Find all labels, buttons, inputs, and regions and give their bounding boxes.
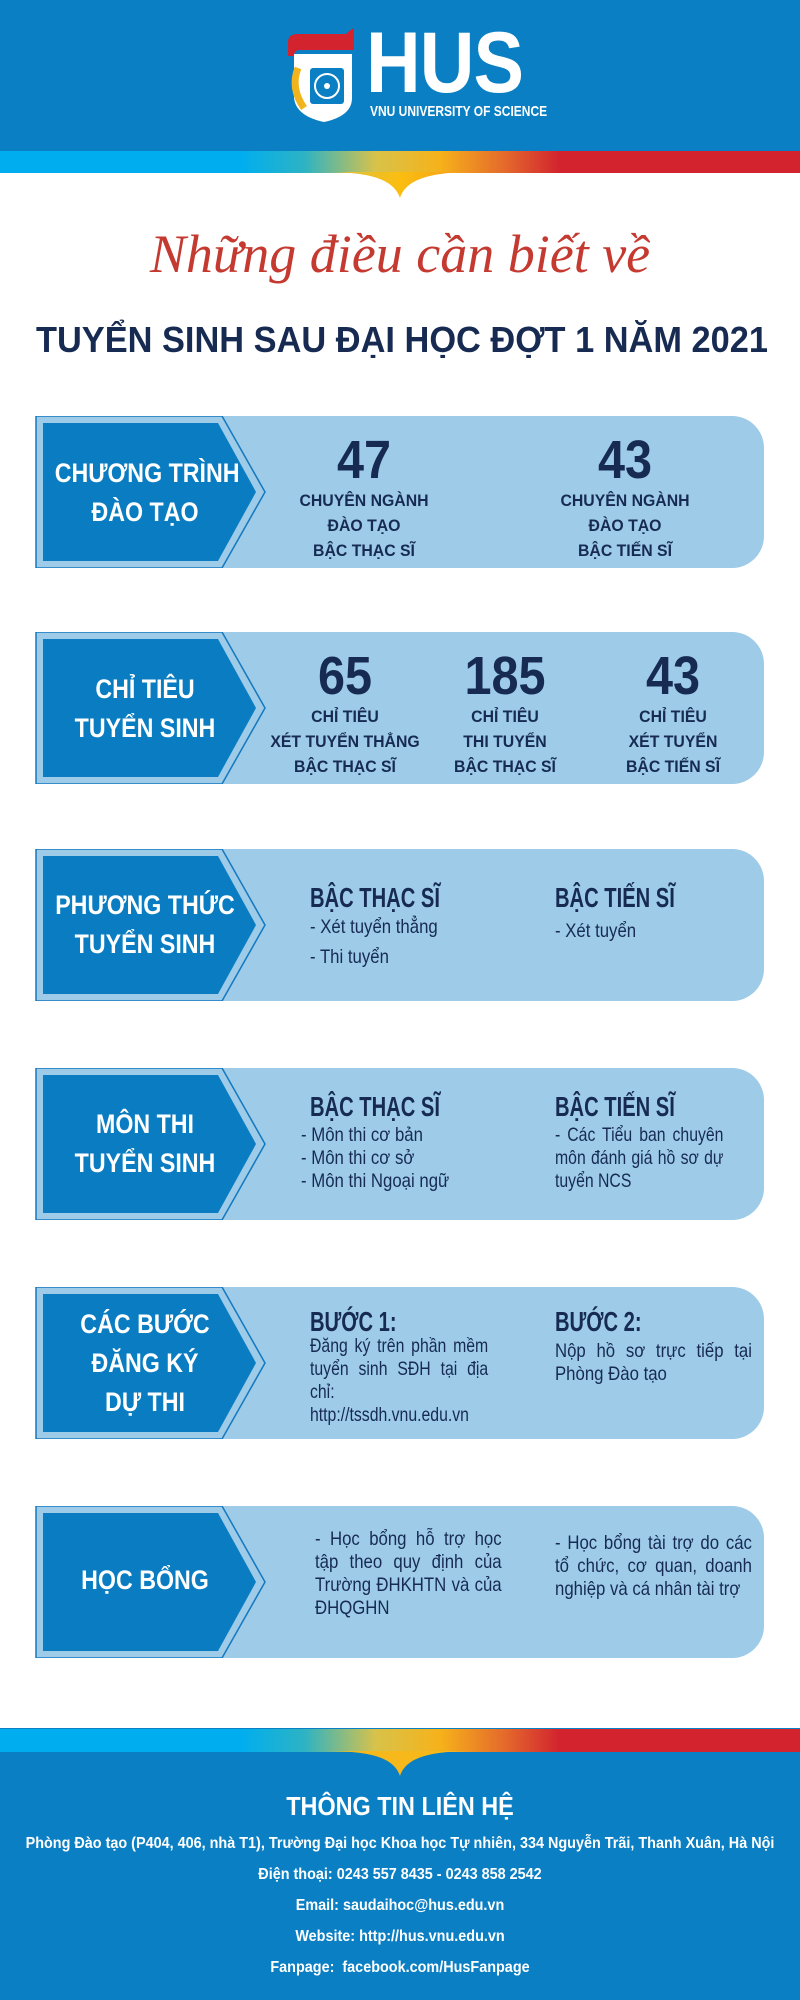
panel: môn thi tuyển sinh: TUYỂN SINH [75, 1148, 215, 1178]
panel: chỉ tiêu tuyển sinh: CHỈ TIÊU [95, 674, 195, 704]
footer: contact details: Website: http://hus.vnu.edu.vn [295, 1928, 505, 1945]
panel: chương trình đào tạo: 47 [337, 430, 391, 490]
panel: chương trình đào tạo: CHƯƠNG TRÌNH [55, 458, 240, 488]
panel: các bước đăng ký dự thi [35, 1287, 764, 1439]
panel: chỉ tiêu tuyển sinh: CHỈ TIÊU [311, 707, 379, 726]
panel: các bước đăng ký dự thi: DỰ THI [105, 1387, 185, 1417]
panel: chỉ tiêu tuyển sinh: 43 [646, 646, 700, 706]
panel: chỉ tiêu tuyển sinh: XÉT TUYỂN [629, 732, 717, 751]
script title: Những điều cần biết về [150, 224, 650, 284]
panel: các bước đăng ký dự thi: Nộp hồ sơ trực tiếp tại Phòng Đào tạo [555, 1340, 752, 1385]
panel: các bước đăng ký dự thi: CÁC BƯỚC [80, 1309, 210, 1339]
panel: môn thi tuyển sinh [35, 1068, 764, 1220]
panel: chỉ tiêu tuyển sinh: TUYỂN SINH [75, 713, 215, 743]
panel: phương thức tuyển sinh: BẬC THẠC SĨ [310, 882, 440, 913]
panel: chỉ tiêu tuyển sinh: BẬC THẠC SĨ [454, 757, 556, 776]
logo: VNU UNIVERSITY OF SCIENCE [370, 103, 547, 120]
logo [288, 15, 547, 122]
panel: chỉ tiêu tuyển sinh [35, 632, 764, 784]
panel: chương trình đào tạo [35, 416, 764, 568]
panel: học bổng: - Học bổng hỗ trợ học tập theo quy định của Trường ĐHKHTN và của ĐHQGHN [315, 1528, 502, 1619]
header band [0, 0, 800, 198]
panel: phương thức tuyển sinh: BẬC TIẾN SĨ [555, 882, 675, 913]
panel: học bổng: - Học bổng tài trợ do các tổ chức, cơ quan, doanh nghiệp và cá nhân tài trợ [555, 1532, 752, 1600]
footer: contact details: Điện thoại: 0243 557 8435 - 0243 858 2542 [258, 1866, 542, 1883]
panel: môn thi tuyển sinh: - Môn thi cơ bản [301, 1124, 423, 1146]
footer: contact details: Phòng Đào tạo (P404, 406, nhà T1), Trường Đại học Khoa học Tự nhiên, 334 Nguyễn Trãi, Thanh Xuân, Hà Nội [26, 1835, 774, 1852]
panel: phương thức tuyển sinh [35, 849, 764, 1001]
panel: chương trình đào tạo: BẬC TIẾN SĨ [578, 541, 672, 560]
panel: môn thi tuyển sinh: BẬC THẠC SĨ [310, 1091, 440, 1122]
panel: chương trình đào tạo: CHUYÊN NGÀNH [560, 491, 690, 510]
panel: chương trình đào tạo: ĐÀO TẠO [91, 497, 199, 527]
panel: học bổng: HỌC BỔNG [81, 1565, 209, 1595]
panel: các bước đăng ký dự thi: BƯỚC 2: [555, 1306, 642, 1337]
panel: chỉ tiêu tuyển sinh: 65 [318, 646, 372, 706]
HUS wordmark: HUS [366, 15, 523, 111]
panel: chương trình đào tạo: ĐÀO TẠO [328, 516, 400, 535]
panel: chỉ tiêu tuyển sinh: CHỈ TIÊU [471, 707, 539, 726]
panel: chương trình đào tạo: 43 [598, 430, 652, 490]
panel: môn thi tuyển sinh: BẬC TIẾN SĨ [555, 1091, 675, 1122]
panel: phương thức tuyển sinh: PHƯƠNG THỨC [55, 890, 235, 920]
panel: môn thi tuyển sinh: - Các Tiểu ban chuyên môn đánh giá hồ sơ dự tuyển NCS [555, 1124, 723, 1192]
panel: chương trình đào tạo: CHUYÊN NGÀNH [299, 491, 429, 510]
footer: contact details [26, 1834, 774, 1976]
panel: chỉ tiêu tuyển sinh: BẬC THẠC SĨ [294, 757, 396, 776]
panel: môn thi tuyển sinh: - Môn thi cơ sở [301, 1147, 414, 1169]
panel: chỉ tiêu tuyển sinh: XÉT TUYỂN THẲNG [270, 732, 420, 751]
panel: phương thức tuyển sinh: - Xét tuyển thẳng [310, 916, 438, 938]
icon: emblem [288, 28, 354, 122]
footer: contact details: Fanpage: facebook.com/HusFanpage [270, 1959, 530, 1976]
panel: các bước đăng ký dự thi: Đăng ký trên phần mềm tuyển sinh SĐH tại địa chỉ: http://tssdh.vnu.edu.vn [310, 1335, 488, 1426]
panel: chỉ tiêu tuyển sinh: THI TUYỂN [463, 732, 547, 751]
panel: phương thức tuyển sinh: TUYỂN SINH [75, 929, 215, 959]
panel: chương trình đào tạo: ĐÀO TẠO [589, 516, 661, 535]
panel: các bước đăng ký dự thi: ĐĂNG KÝ [91, 1348, 199, 1378]
panel: chỉ tiêu tuyển sinh: BẬC TIẾN SĨ [626, 757, 720, 776]
panel: các bước đăng ký dự thi: BƯỚC 1: [310, 1306, 397, 1337]
panel: môn thi tuyển sinh: MÔN THI [96, 1109, 194, 1139]
footer: contact title: THÔNG TIN LIÊN HỆ [286, 1791, 514, 1821]
panel: chương trình đào tạo: BẬC THẠC SĨ [313, 541, 415, 560]
panel: chỉ tiêu tuyển sinh: 185 [464, 646, 546, 706]
panel: học bổng [35, 1506, 764, 1658]
panel: chỉ tiêu tuyển sinh: CHỈ TIÊU [639, 707, 707, 726]
footer band [0, 1728, 800, 2000]
panel: môn thi tuyển sinh: - Môn thi Ngoại ngữ [301, 1170, 449, 1192]
panel: phương thức tuyển sinh: - Xét tuyển [555, 920, 636, 942]
footer: contact details: Email: saudaihoc@hus.edu.vn [296, 1897, 504, 1914]
panel: phương thức tuyển sinh: - Thi tuyển [310, 946, 389, 968]
